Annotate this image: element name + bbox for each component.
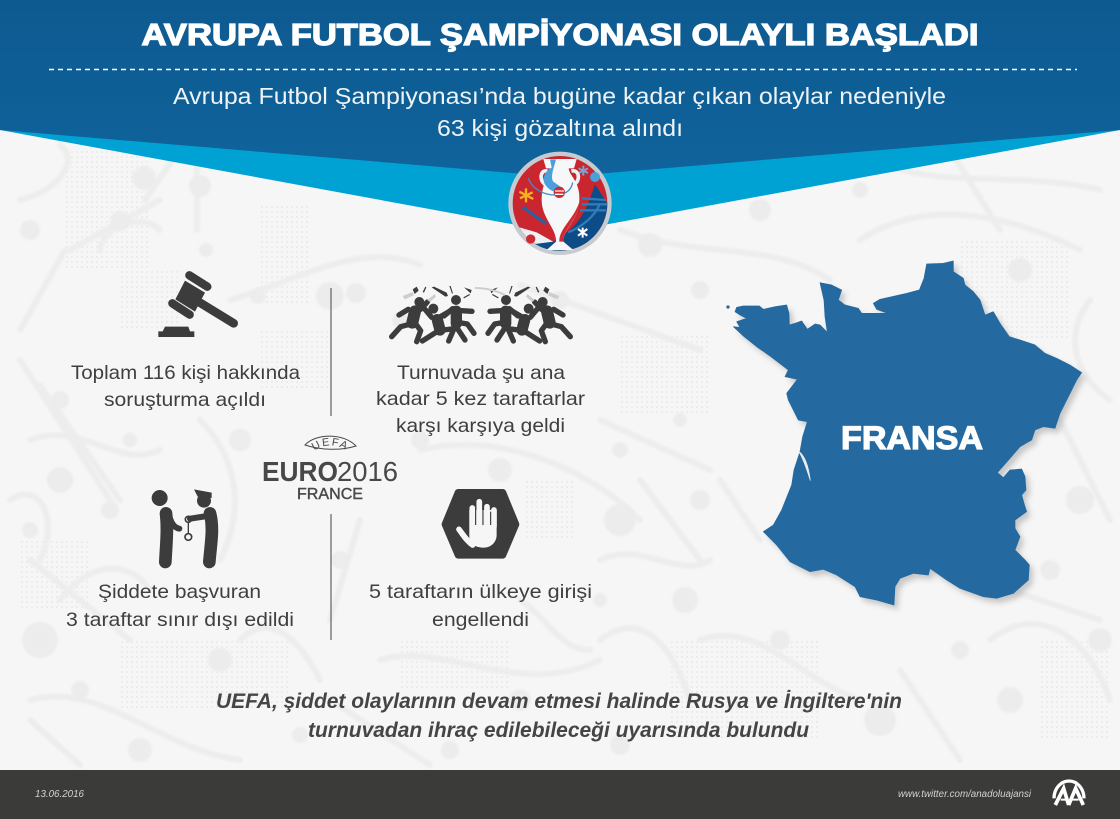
text: fan clashes: Turnuvada şu ana <box>397 362 565 384</box>
text: fan clashes <box>376 362 586 437</box>
date: 13.06.2016 <box>35 789 84 800</box>
UEFA warning text: UEFA, şiddet olaylarının devam etmesi halinde Rusya ve İngiltere'nin <box>216 690 902 713</box>
UEFA warning text: turnuvadan ihraç edilebileceği uyarısında bulundu <box>308 719 809 742</box>
subtitle: 63 kişi gözaltına alındı <box>437 115 683 141</box>
Euro 2016 logo: FRANCE <box>297 486 363 503</box>
icon: police arrest <box>152 489 212 562</box>
footer bar <box>0 770 1120 819</box>
text: entry denied: 5 taraftarın ülkeye girişi <box>369 581 592 603</box>
icon: stop hand <box>445 493 516 555</box>
label: FRANSA: FRANSA <box>841 420 983 456</box>
text: fan clashes: karşı karşıya geldi <box>396 415 565 437</box>
text: entry denied <box>369 581 592 631</box>
divider top <box>330 288 332 416</box>
UEFA warning text <box>216 690 902 742</box>
twitter url: www.twitter.com/anadoluajansi <box>898 789 1032 800</box>
icon: gavel <box>158 275 234 337</box>
Euro 2016 logo: 2016 <box>337 456 398 487</box>
subtitle <box>173 83 946 141</box>
Euro 2016 logo: EURO <box>262 456 338 487</box>
Euro 2016 trophy badge <box>508 152 612 255</box>
text: investigations: Toplam 116 kişi hakkında <box>71 362 300 384</box>
map of France <box>726 261 1086 610</box>
text: entry denied: engellendi <box>432 609 529 631</box>
subtitle: Avrupa Futbol Şampiyonası’nda bugüne kadar çıkan olaylar nedeniyle <box>173 83 946 109</box>
icon: Anadolu Agency logo <box>1054 781 1084 805</box>
title: AVRUPA FUTBOL ŞAMPİYONASI OLAYLI BAŞLADI <box>142 17 978 52</box>
trophy <box>528 159 580 250</box>
panel: investigations <box>71 275 300 411</box>
icon: fighting fans <box>392 286 570 342</box>
panel: entry denied <box>369 493 592 631</box>
panel: deported fans <box>66 489 294 631</box>
header banner <box>0 0 1120 233</box>
Euro 2016 logo <box>262 436 398 503</box>
text: investigations <box>71 362 300 411</box>
text: investigations: soruşturma açıldı <box>104 389 266 411</box>
text: deported fans: Şiddete başvuran <box>98 581 261 603</box>
divider bottom <box>330 514 332 640</box>
text: deported fans: 3 taraftar sınır dışı edildi <box>66 609 294 631</box>
panel: fan clashes <box>376 286 586 437</box>
Euro 2016 logo: UEFA <box>311 438 346 450</box>
text: deported fans <box>66 581 294 631</box>
text: fan clashes: kadar 5 kez taraftarlar <box>376 388 586 410</box>
